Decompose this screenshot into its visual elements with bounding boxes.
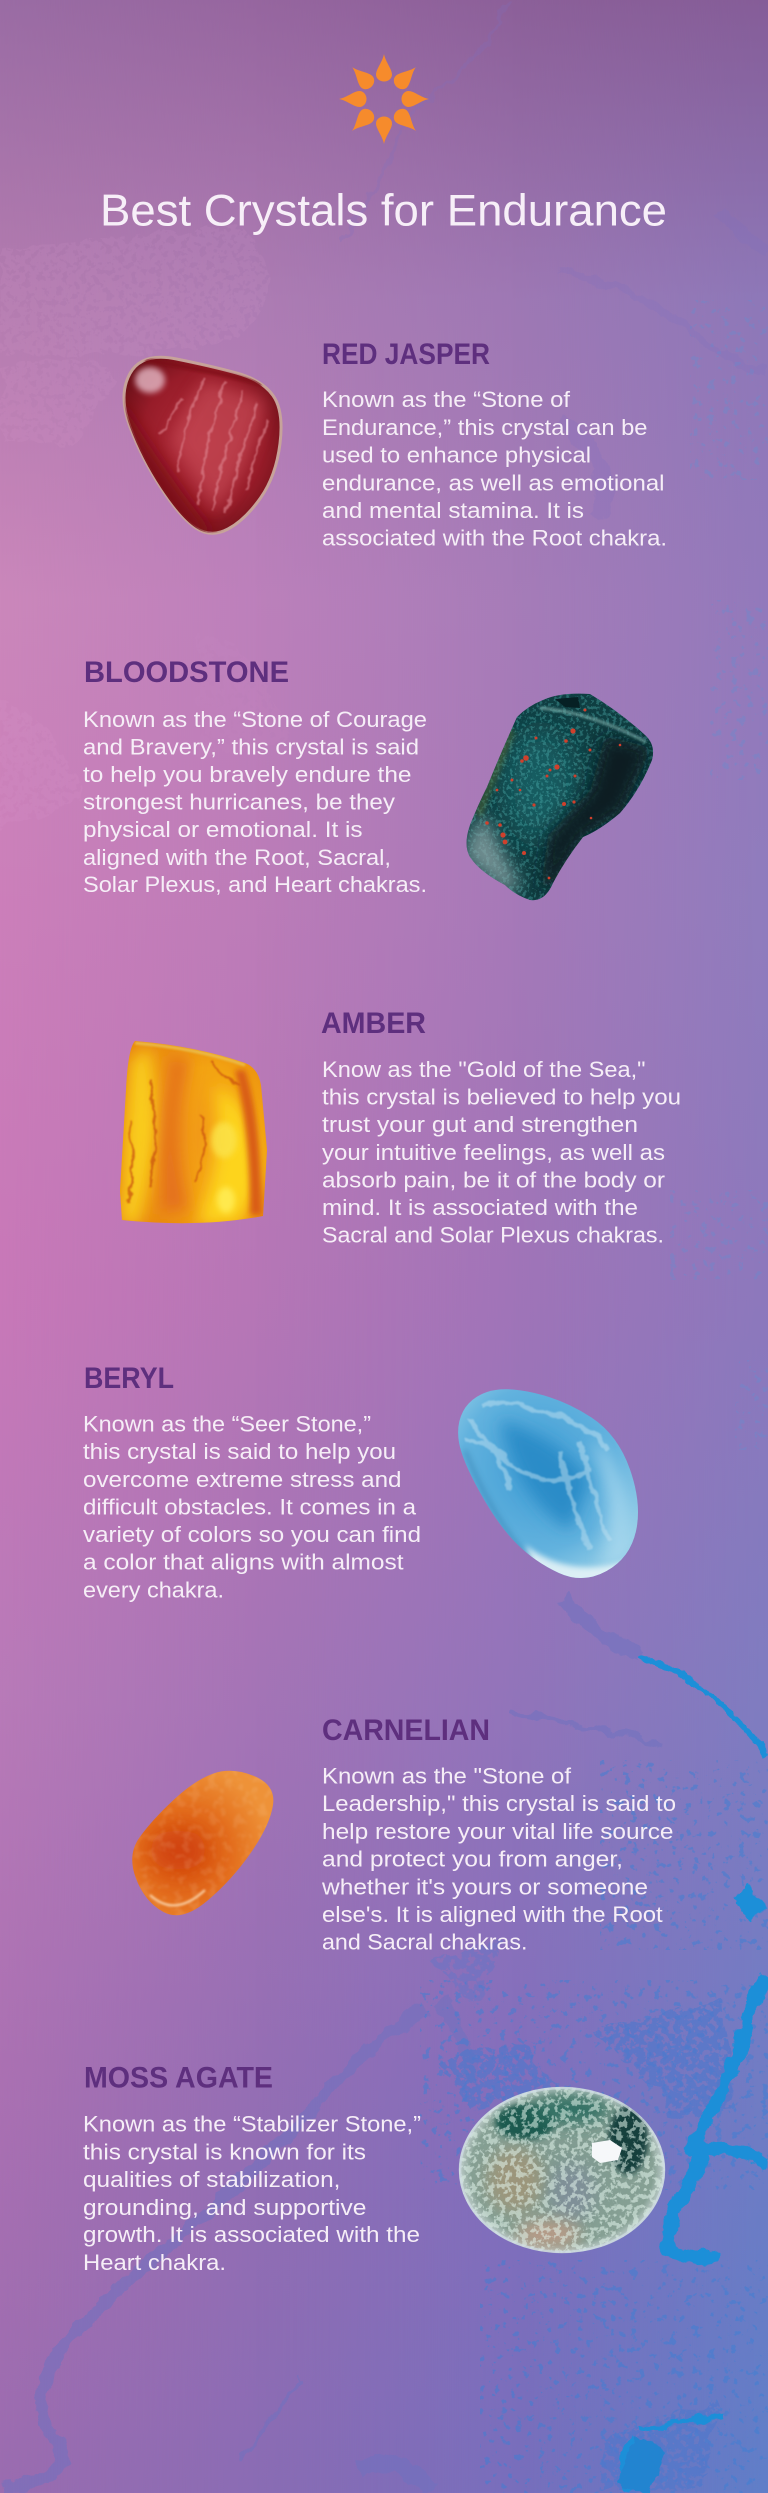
text block: bloodstone: to help you bravely endure the [83,762,412,787]
heading: moss agate: MOSS AGATE [84,2062,273,2094]
text block: amber: this crystal is believed to help you [322,1085,681,1110]
marble texture: faint purple-blue veins bottom [0,1598,661,2490]
text block: moss agate: this crystal is known for its [83,2139,366,2164]
text block: red jasper: associated with the Root chakra. [322,526,667,551]
text block: carnelian: help restore your vital life source [322,1819,674,1844]
text block: amber: absorb pain, be it of the body or [322,1168,666,1192]
text block: moss agate: Heart chakra. [83,2250,226,2275]
text block: beryl: overcome extreme stress and [83,1467,402,1492]
text block: carnelian [321,1764,676,1954]
text block: bloodstone: Known as the “Stone of Courage [83,707,427,732]
text block: beryl: variety of colors so you can find [83,1522,421,1547]
text block: beryl: a color that aligns with almost [83,1550,404,1575]
icon: amber stone [120,1041,267,1225]
text block: carnelian: Known as the "Stone of [322,1764,572,1788]
text block: red jasper: used to enhance physical [322,443,591,468]
text block: carnelian: else's. It is aligned with the Root [322,1902,663,1927]
text block: moss agate: Known as the “Stabilizer Stone,” [83,2112,421,2136]
text block: moss agate: grounding, and supportive [83,2195,366,2220]
text block: carnelian: whether it's yours or someone [321,1874,648,1900]
icon: beryl stone [458,1389,638,1590]
panel: bloodstone [83,656,660,905]
text block: amber: trust your gut and strengthen [322,1112,638,1137]
marble texture: light veins top-left [0,225,290,830]
text block: beryl: difficult obstacles. It comes in a [83,1495,417,1520]
text block: beryl: this crystal is said to help you [83,1439,396,1464]
text block: red jasper: Endurance,” this crystal can be [322,415,648,440]
marble texture: purple veins top [340,0,768,520]
icon: orange sun [339,54,429,144]
panel: red jasper [110,338,667,551]
text block: beryl: Known as the “Seer Stone,” [83,1411,371,1436]
panel: moss agate [83,2062,665,2275]
text block: carnelian: and protect you from anger, [322,1847,623,1872]
panel: beryl [83,1362,638,1602]
text block: red jasper [322,387,667,551]
icon: moss agate stone [459,2087,665,2253]
text block: red jasper: and mental stamina. It is [322,498,584,523]
text block: bloodstone: strongest hurricanes, be they [83,790,396,815]
text block: amber: mind. It is associated with the [322,1195,638,1220]
heading: carnelian: CARNELIAN [322,1714,490,1747]
marble texture: blue flecks on right edge [670,300,768,1450]
text block: moss agate: qualities of stabilization, [83,2167,340,2192]
text block: moss agate [83,2112,421,2275]
heading: beryl: BERYL [84,1362,174,1395]
text block: carnelian: Leadership," this crystal is said to [322,1791,676,1816]
text block: amber [322,1057,681,1248]
text block: amber: Know as the "Gold of the Sea," [322,1057,646,1082]
text block: bloodstone: aligned with the Root, Sacral, [83,845,391,870]
text block: bloodstone: Solar Plexus, and Heart chakras. [83,872,427,897]
text block: bloodstone [83,707,427,897]
marble texture: mottled blue patches lower right [430,1940,735,2490]
text block: red jasper: Known as the “Stone of [322,387,571,412]
heading: amber: AMBER [321,1007,426,1040]
text block: beryl [83,1411,421,1602]
text block: red jasper: endurance, as well as emotional [322,470,664,495]
text block: amber: your intuitive feelings, as well as [322,1140,665,1165]
text block: beryl: every chakra. [83,1577,224,1602]
text block: amber: Sacral and Solar Plexus chakras. [322,1223,664,1248]
marble texture: blue flecks around lower right [420,1760,768,2493]
heading: bloodstone: BLOODSTONE [84,656,289,689]
panel: carnelian [128,1714,676,1954]
text block: bloodstone: physical or emotional. It is [83,817,362,842]
text block: carnelian: and Sacral chakras. [322,1930,528,1954]
heading: red jasper: RED JASPER [322,338,490,371]
panel: amber [120,1007,681,1248]
text block: moss agate: growth. It is associated with the [83,2222,420,2247]
icon: carnelian stone [132,1770,274,1916]
marble texture: bright blue veins bottom right [622,1655,768,2490]
icon: bloodstone stone [460,690,660,905]
title: Best Crystals for Endurance [100,186,667,236]
text block: bloodstone: and Bravery,” this crystal is said [83,734,419,759]
icon: red jasper stone [110,357,281,540]
